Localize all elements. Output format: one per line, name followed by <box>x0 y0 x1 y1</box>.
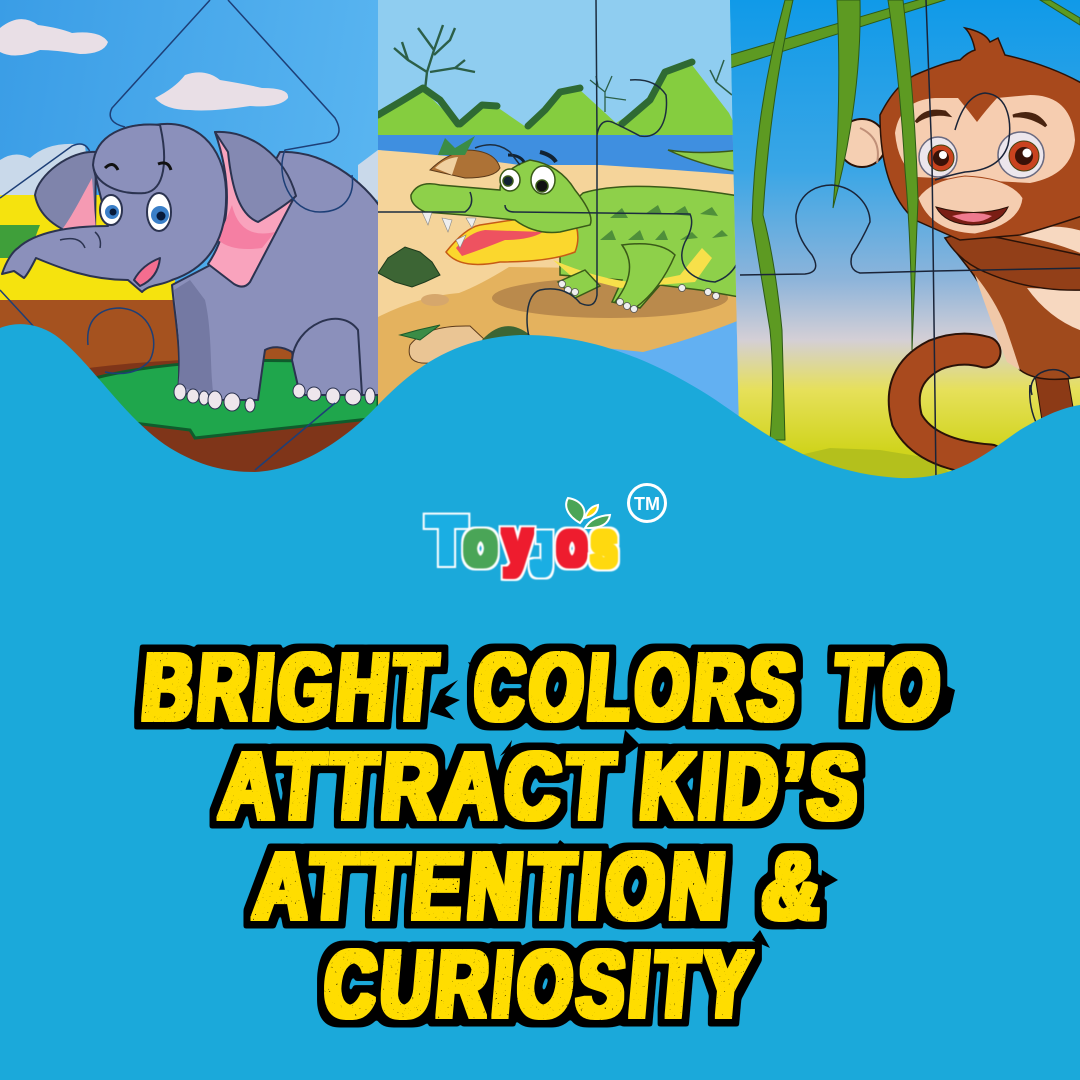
logo wordmark: o <box>464 510 497 579</box>
line 2: attract kid's: KID’S <box>636 733 868 840</box>
line 1: bright colors to <box>138 634 950 741</box>
grass strip <box>804 448 948 478</box>
monkey tail <box>904 349 990 460</box>
elephant mouth <box>134 258 160 286</box>
logo leaves <box>566 498 610 528</box>
line 1: bright colors to: BRIGHT <box>138 634 446 741</box>
line 4: curiosity: CURIOSITY <box>320 931 760 1038</box>
logo wordmark: o <box>557 510 587 579</box>
trademark badge <box>628 484 666 522</box>
trademark badge: TM <box>634 494 660 514</box>
panel: crocodile puzzle <box>378 0 739 416</box>
elephant eyes <box>100 195 122 225</box>
monkey mouth <box>936 207 1008 225</box>
crocodile lower jaw <box>446 215 578 264</box>
crocodile scales <box>600 205 728 240</box>
monkey face <box>895 95 1075 183</box>
line 3: attention &: ATTENTION <box>250 833 735 940</box>
crocodile <box>411 150 745 312</box>
ground bands <box>0 195 175 300</box>
logo wordmark: s <box>591 508 617 580</box>
monkey body <box>945 210 1080 379</box>
monkey muzzle <box>918 176 1023 234</box>
monkey leg <box>1035 378 1074 418</box>
puzzle cut lines <box>0 0 353 470</box>
monkey arm <box>945 235 1080 290</box>
crocodile snout and head <box>411 160 591 232</box>
puzzle cut lines <box>740 0 1080 480</box>
logo wordmark: y <box>503 508 532 577</box>
puzzle cut lines <box>378 0 740 340</box>
elephant left ear <box>35 152 96 238</box>
elephant body <box>172 152 385 400</box>
logo wordmark: T <box>427 503 466 577</box>
crocodile body <box>560 186 745 308</box>
bare trees <box>394 25 732 112</box>
leaves and vines <box>730 0 1080 440</box>
crocodile leg <box>615 244 675 308</box>
elephant head and trunk <box>2 124 226 292</box>
monkey head <box>880 28 1080 240</box>
elephant <box>2 124 385 412</box>
title: bright colors to attract kid's attention and curiosity <box>138 634 950 1038</box>
logo: Toyjos <box>427 484 666 587</box>
crocodile eyes <box>500 169 520 191</box>
elephant toes <box>174 384 375 412</box>
monkey ear <box>838 119 886 167</box>
monkey eyebrows <box>916 111 948 122</box>
logo wordmark: J <box>532 522 552 587</box>
crocodile teeth <box>422 212 476 248</box>
line 1: bright colors to: COLORS <box>470 634 805 741</box>
line 1: bright colors to: TO <box>830 634 950 741</box>
wave: blue lower panel <box>0 324 1080 1080</box>
crocodile tail <box>668 150 740 172</box>
title spikes <box>280 662 955 975</box>
river and sand <box>378 135 740 175</box>
logo wordmark <box>427 503 617 587</box>
line 3: attention &: & <box>758 833 832 940</box>
elephant right ear <box>208 132 295 287</box>
hills <box>378 65 740 136</box>
clouds <box>0 19 378 200</box>
monkey chest <box>1013 227 1080 255</box>
line 2: attract kid's: ATTRACT <box>216 733 624 840</box>
rocks and bushes <box>430 150 500 178</box>
panel: monkey puzzle <box>730 0 1080 480</box>
monkey eyes <box>919 137 957 177</box>
panel: elephant puzzle <box>0 0 385 480</box>
